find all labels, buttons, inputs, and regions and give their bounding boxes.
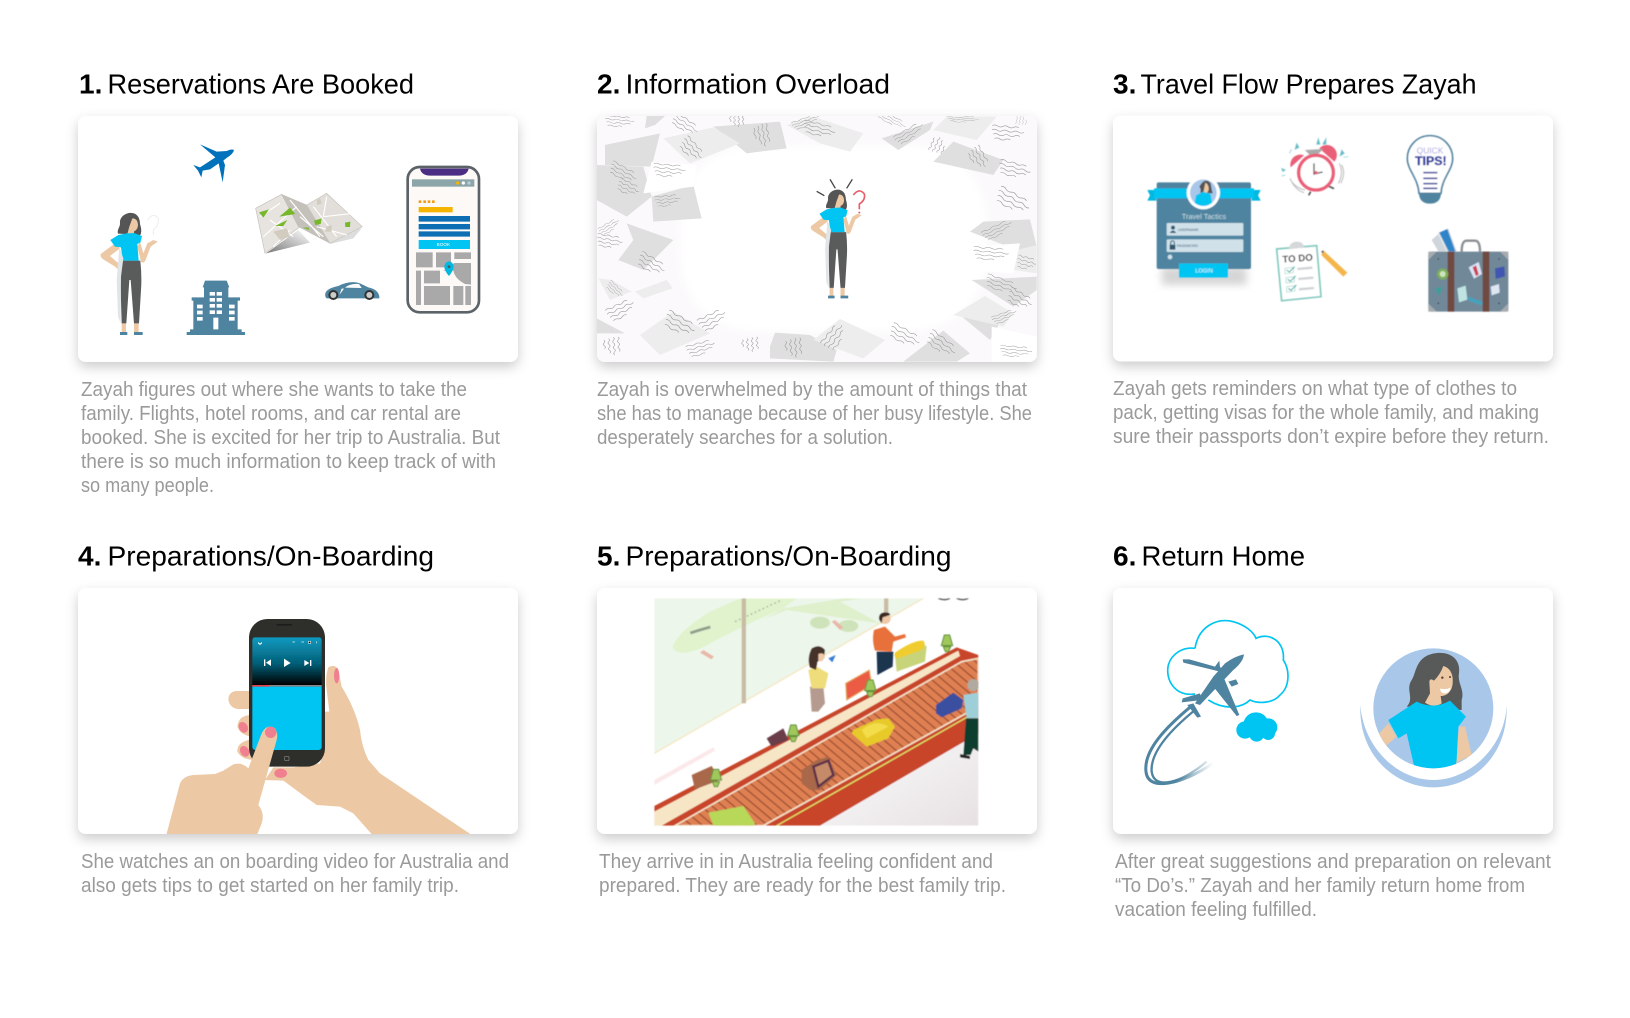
icon: login card: USERNAME xyxy=(1178,228,1199,232)
icon: quick tips lightbulb: TIPS! xyxy=(1415,154,1447,168)
text block: step 2: desperately searches for a solution. xyxy=(597,427,893,449)
illustration: paper pile and woman xyxy=(593,108,1040,363)
card: step 5 xyxy=(597,588,1037,834)
icon: folded map xyxy=(256,193,362,253)
text block: step 3 xyxy=(1113,378,1549,448)
icon: smiling woman portrait xyxy=(1360,648,1507,787)
text block: step 1: there is so much information to keep track of with xyxy=(81,451,496,473)
icon: alarm clock xyxy=(1282,138,1348,195)
text block: step 4: She watches an on boarding video for Australia and xyxy=(81,851,509,873)
card: step 6 xyxy=(1113,588,1553,834)
icon: login card xyxy=(1147,176,1261,285)
text block: step 5 xyxy=(599,851,1006,897)
heading: step 6: Return Home xyxy=(1142,540,1305,572)
panel: step 3 travel flow xyxy=(1113,68,1553,448)
icon: woman with faint question mark xyxy=(101,213,158,335)
icon: login card: LOGIN xyxy=(1195,269,1213,275)
heading: step 4: Preparations/On-Boarding xyxy=(108,540,434,572)
text block: step 4: also gets tips to get started on her family trip. xyxy=(81,875,459,897)
text block: step 3: sure their passports don’t expire before they return. xyxy=(1113,426,1549,448)
text block: step 1: Zayah figures out where she wants to take the xyxy=(81,379,467,401)
card: step 3 xyxy=(1113,116,1553,362)
text block: step 3: Zayah gets reminders on what type of clothes to xyxy=(1113,378,1517,400)
icon: booking phone: BOOK xyxy=(437,242,451,247)
icon: car xyxy=(325,282,379,300)
heading: step 5: Preparations/On-Boarding xyxy=(626,540,952,572)
heading: step 5: 5. xyxy=(597,540,620,572)
text block: step 1: booked. She is excited for her trip to Australia. But xyxy=(81,427,500,449)
card: step 1 xyxy=(78,116,518,362)
panel: step 5 arrival xyxy=(597,540,1037,897)
icon: booking phone xyxy=(408,167,479,312)
icon: phone xyxy=(249,619,325,767)
panel: step 4 on-boarding xyxy=(78,540,518,897)
icon: quick tips lightbulb xyxy=(1407,136,1453,204)
panel: step 2 information overload xyxy=(593,68,1040,449)
lamp posts xyxy=(710,635,953,787)
icon: pointing hand xyxy=(166,727,277,836)
icon: small cloud xyxy=(1236,712,1277,742)
icon: quick tips lightbulb: QUICK xyxy=(1417,145,1444,155)
icon: to-do clipboard with pencil xyxy=(1277,242,1347,301)
text block: step 5: They arrive in in Australia feeling confident and xyxy=(599,851,993,873)
panel: step 6 return home xyxy=(1113,540,1553,921)
icon: to-do clipboard with pencil: TO DO xyxy=(1282,253,1314,266)
text block: step 1 xyxy=(81,379,500,497)
heading: step 3: Travel Flow Prepares Zayah xyxy=(1140,68,1476,100)
icon: cloud outline xyxy=(1168,621,1288,707)
text block: step 6: vacation feeling fulfilled. xyxy=(1115,899,1317,921)
icon: overwhelmed woman with question mark xyxy=(811,179,865,298)
card: step 4 xyxy=(78,588,518,834)
text block: step 2: she has to manage because of her busy lifestyle. She xyxy=(597,403,1032,425)
icon: holding hand xyxy=(228,666,473,836)
icon: travel suitcase xyxy=(1428,229,1508,312)
illustration: step 3 xyxy=(1147,136,1508,312)
window with plane xyxy=(654,598,923,785)
heading: step 1: 1. xyxy=(79,68,102,100)
text block: step 6 xyxy=(1115,851,1551,921)
heading: step 3: 3. xyxy=(1113,68,1136,100)
icon: login card: PASSWORD xyxy=(1177,244,1198,248)
text block: step 6: After great suggestions and preparation on relevant xyxy=(1115,851,1551,873)
text block: step 3: pack, getting visas for the whole family, and making xyxy=(1113,402,1539,424)
text block: step 2: Zayah is overwhelmed by the amount of things that xyxy=(597,379,1027,401)
icon: hotel building xyxy=(187,281,245,335)
illustration: hands holding phone xyxy=(166,619,473,836)
heading: step 6: 6. xyxy=(1113,540,1136,572)
icon: airplane with trail xyxy=(1146,654,1244,784)
illustration: step 6 xyxy=(1146,621,1507,787)
text block: step 5: prepared. They are ready for the best family trip. xyxy=(599,875,1006,897)
heading: step 4: 4. xyxy=(78,540,101,572)
icon: pink fingernails xyxy=(237,668,339,778)
text block: step 2 xyxy=(597,379,1032,449)
text block: step 1: so many people. xyxy=(81,475,214,497)
text block: step 6: “To Do’s.” Zayah and her family return home from xyxy=(1115,875,1525,897)
conveyor xyxy=(654,647,978,826)
floor xyxy=(820,730,978,826)
icon: blue airplane xyxy=(193,144,234,182)
people and luggage xyxy=(692,612,979,826)
illustration: step 1 xyxy=(101,144,479,335)
heading: step 2: 2. xyxy=(597,68,620,100)
text block: step 4 xyxy=(81,851,509,897)
text block: step 1: family. Flights, hotel rooms, and car rental are xyxy=(81,403,461,425)
icon: login card: Travel Tactics xyxy=(1182,212,1227,221)
heading: step 1: Reservations Are Booked xyxy=(108,68,414,100)
panel: step 1 reservations xyxy=(78,68,518,497)
card: step 2 xyxy=(597,116,1037,362)
illustration: airport baggage carousel xyxy=(654,598,979,826)
heading: step 2: Information Overload xyxy=(626,68,890,100)
